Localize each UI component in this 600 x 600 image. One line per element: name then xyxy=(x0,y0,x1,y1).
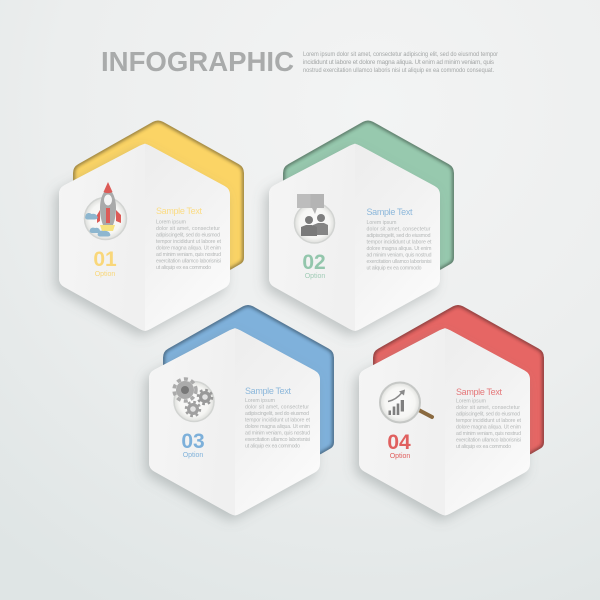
body text: Lorem ipsum xyxy=(456,398,486,404)
body text: dolor sit amet, consectetur xyxy=(156,226,220,232)
body text: ut aliquip ex ea commodo xyxy=(156,265,211,271)
title: INFOGRAPHIC xyxy=(101,46,294,77)
body text: adipiscingelit, sed do eiusmod xyxy=(245,411,309,417)
panel: option 03 xyxy=(149,305,334,516)
body text: tempor incididunt ut labore et xyxy=(366,240,432,246)
yellow cutout xyxy=(73,120,244,270)
body text xyxy=(245,398,311,450)
blue cutout xyxy=(163,305,334,454)
heading: Sample Text xyxy=(245,386,291,396)
body text: adipiscingelit, sed do eiusmod xyxy=(366,233,431,239)
body text: adipiscingelit, sed do eiusmod xyxy=(156,232,220,238)
body text xyxy=(366,220,432,272)
body text: ut aliquip ex ea commodo xyxy=(366,266,422,272)
body text: Lorem ipsum xyxy=(156,220,186,226)
option label: Option xyxy=(305,273,325,280)
body text: dolore magna aliqua. Ut enim xyxy=(366,246,432,252)
heading: Sample Text xyxy=(156,206,202,216)
body text: dolore magna aliqua. Ut enim xyxy=(245,424,310,430)
intro text block: incididunt ut labore et dolore magna aliqua. Ut enim ad minim veniam, quis xyxy=(303,59,494,66)
icon: rocket xyxy=(84,182,126,240)
body text: exercitation ullamco laborisnisi xyxy=(156,258,221,264)
body text: ut aliquip ex ea commodo xyxy=(456,444,511,450)
number 01: 01 xyxy=(93,248,117,271)
icon: people with speech bubble xyxy=(294,194,334,243)
white hexagon xyxy=(359,328,530,516)
body text: ad minim veniam, quis nostrud xyxy=(156,252,221,258)
body text: dolor sit amet, consectetur xyxy=(245,404,309,410)
body text: ad minim veniam, quis nostrud xyxy=(456,431,521,437)
body text: exercitation ullamco laborisnisi xyxy=(366,259,432,265)
panel: option 04 xyxy=(359,305,544,516)
body text xyxy=(156,220,222,271)
heading: Sample Text xyxy=(456,387,502,397)
number 04: 04 xyxy=(387,431,411,454)
body text: tempor incididunt ut labore et xyxy=(245,418,311,424)
body text: dolor sit amet, consectetur xyxy=(456,405,520,411)
heading: Sample Text xyxy=(366,207,413,217)
white hexagon xyxy=(59,144,230,331)
body text: dolore magna aliqua. Ut enim xyxy=(156,246,221,252)
option label: Option xyxy=(183,452,203,459)
body text: exercitation ullamco laborisnisi xyxy=(245,437,310,443)
icon: magnifier with chart xyxy=(380,382,432,422)
panel: option 01 xyxy=(59,120,244,331)
intro text block: Lorem ipsum dolor sit amet, consectetur adipiscing elit, sed do eiusmod tempor xyxy=(303,51,498,58)
icon: gears xyxy=(174,379,214,422)
panel: option 02 xyxy=(269,120,454,331)
body text: tempor incididunt ut labore et xyxy=(156,239,222,245)
body text: exercitation ullamco laborisnisi xyxy=(456,438,521,444)
green cutout xyxy=(283,120,454,270)
body text: ad minim veniam, quis nostrud xyxy=(366,252,432,258)
body text: adipiscingelit, sed do eiusmod xyxy=(456,412,520,418)
white hexagon xyxy=(269,144,440,331)
option label: Option xyxy=(390,453,410,460)
body text: ut aliquip ex ea commodo xyxy=(245,444,300,450)
body text xyxy=(456,398,522,450)
body text: tempor incididunt ut labore et xyxy=(456,418,522,424)
body text: dolor sit amet, consectetur xyxy=(366,226,431,232)
intro text block xyxy=(303,51,498,74)
body text: dolore magna aliqua. Ut enim xyxy=(456,424,521,430)
body text: Lorem ipsum xyxy=(366,220,396,226)
red cutout xyxy=(373,305,544,454)
option label: Option xyxy=(95,271,115,278)
number 02: 02 xyxy=(302,251,326,274)
body text: Lorem ipsum xyxy=(245,398,275,404)
number 03: 03 xyxy=(181,430,205,453)
body text: ad minim veniam, quis nostrud xyxy=(245,430,310,436)
white hexagon xyxy=(149,328,320,516)
intro text block: nostrud exercitation ullamco laboris nisi ut aliquip ex ea commodo consequat. xyxy=(303,67,494,74)
